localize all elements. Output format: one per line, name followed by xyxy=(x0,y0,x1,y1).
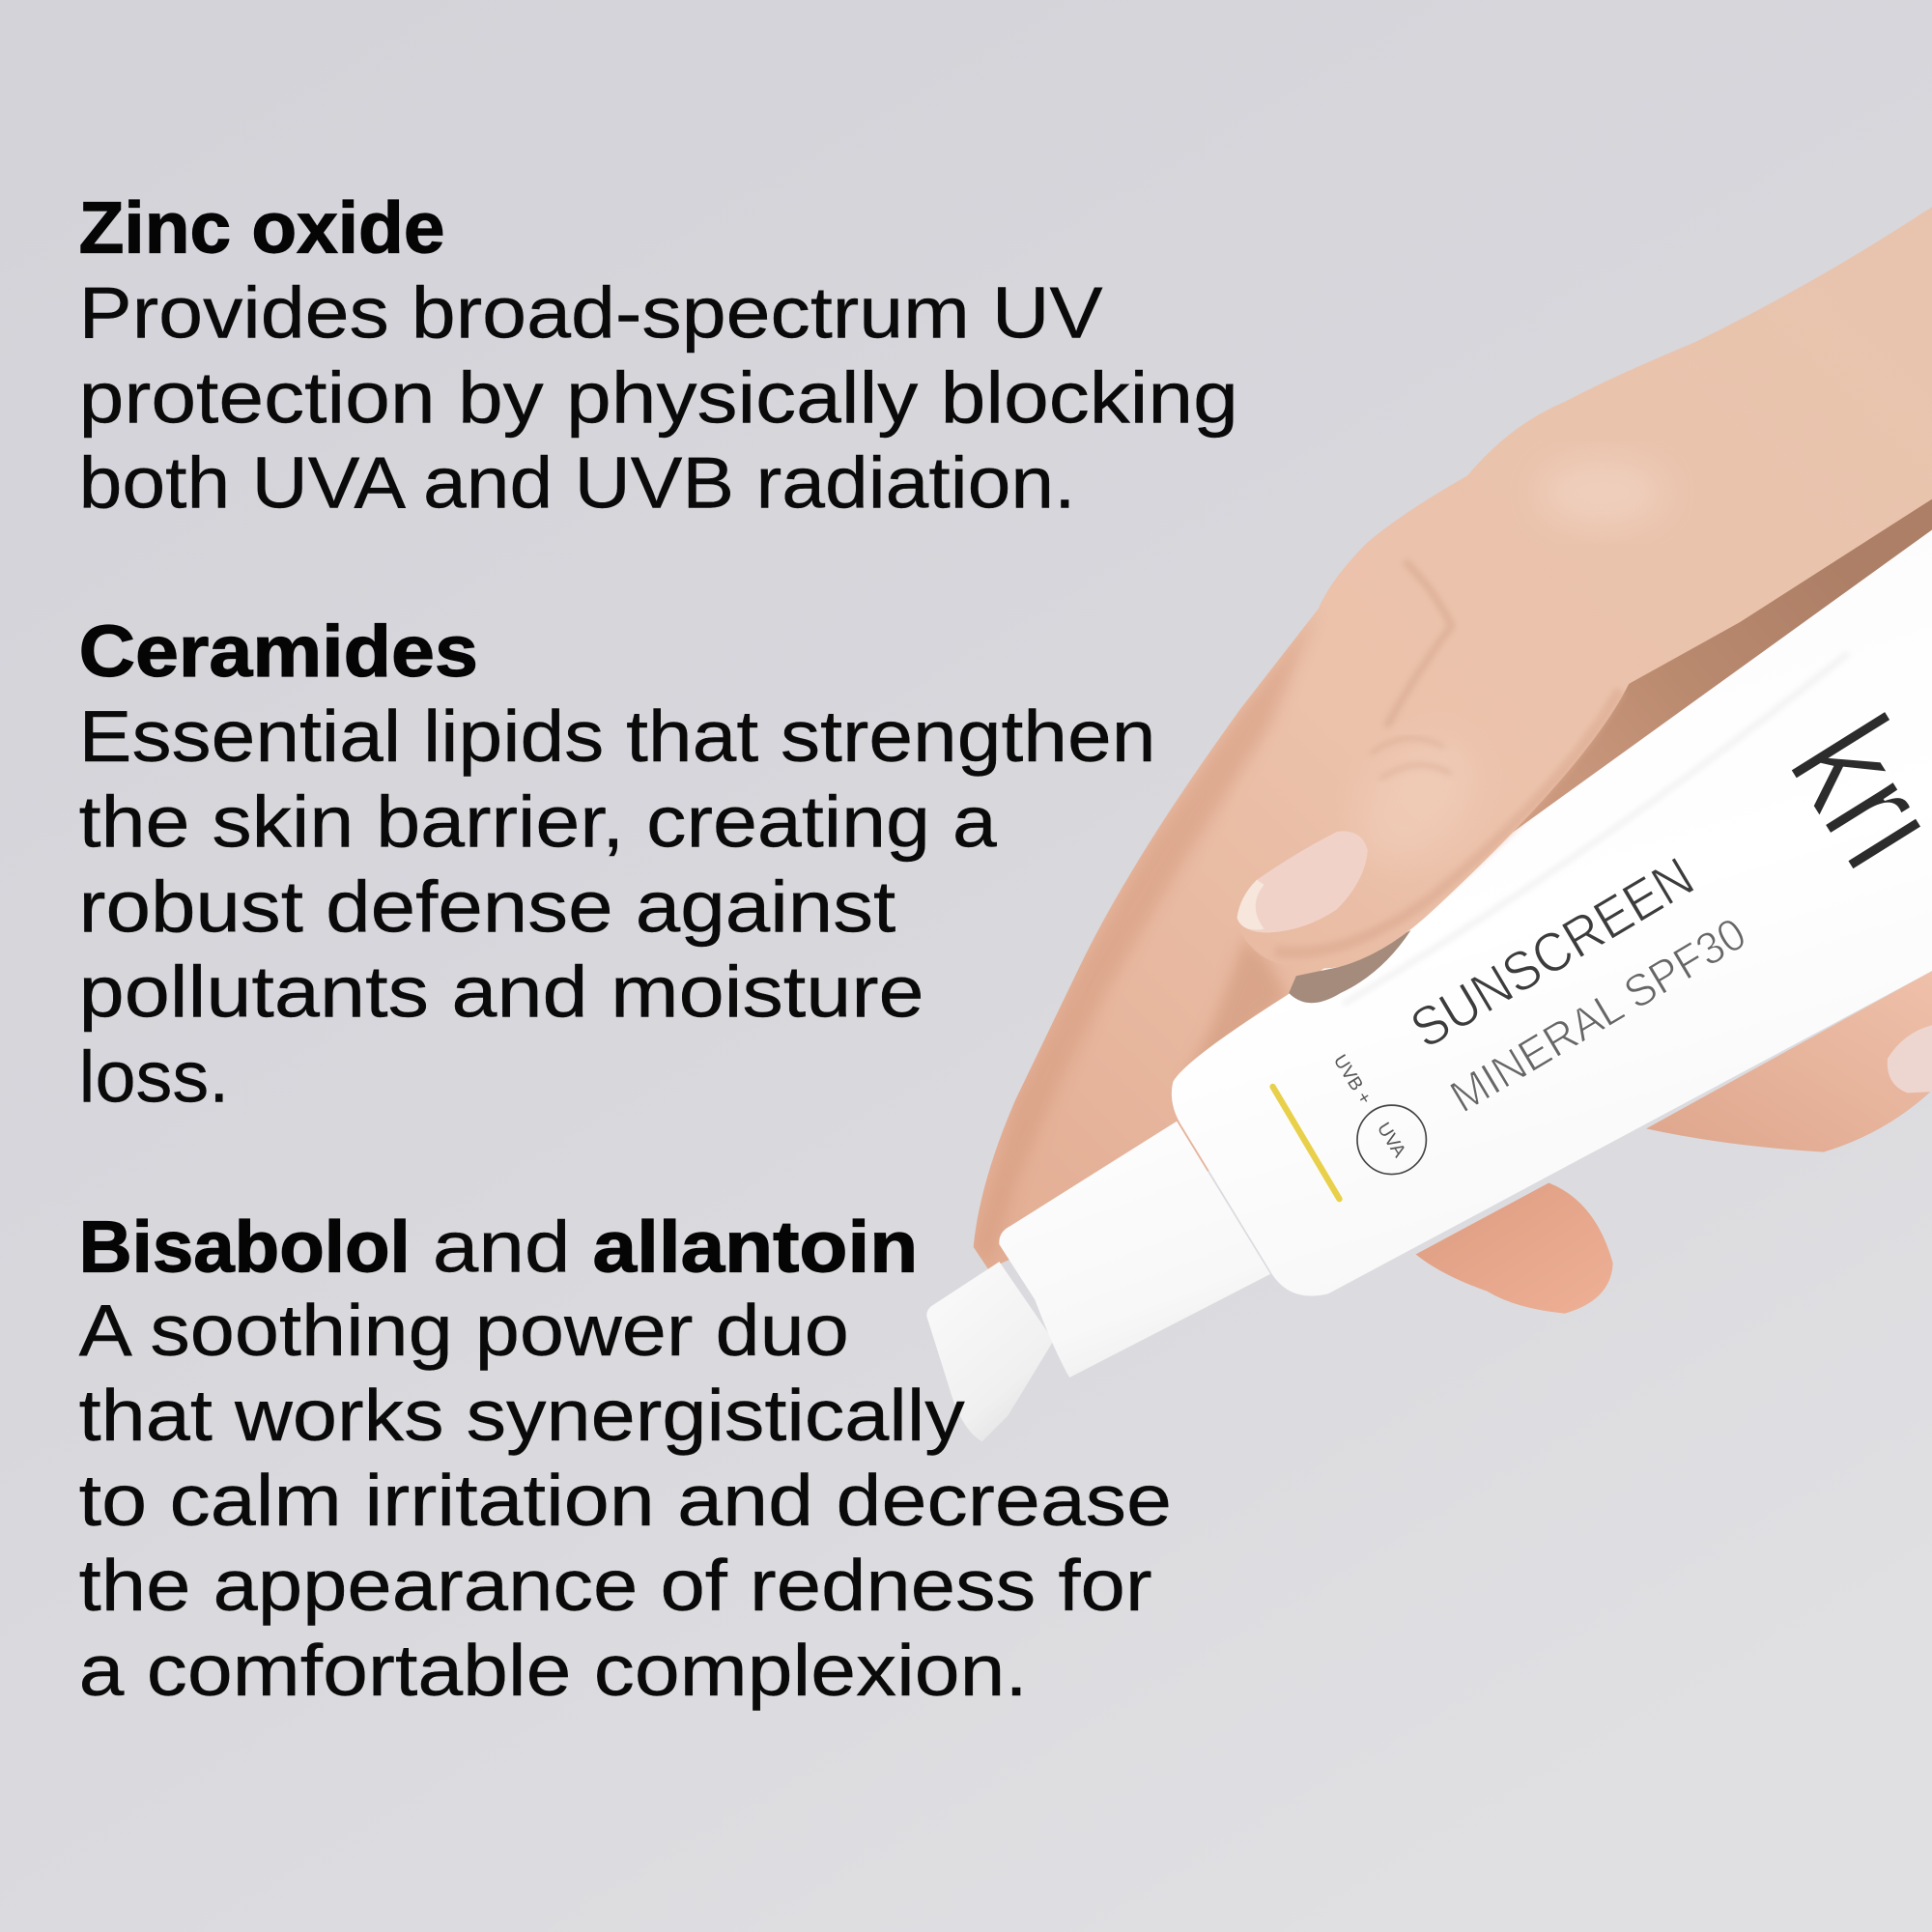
thumb knuckle wrinkles xyxy=(1370,738,1452,779)
hand behind the tube xyxy=(974,207,1932,1269)
thumb nail xyxy=(1237,831,1368,933)
heading xyxy=(79,1206,918,1287)
UVA badge: UVA xyxy=(1373,1120,1409,1161)
body copy: pollutants and moisture xyxy=(79,951,924,1032)
body copy: Provides broad-spectrum UV xyxy=(79,271,1103,353)
body copy xyxy=(79,271,1238,524)
body copy: protection by physically blocking xyxy=(79,356,1238,438)
thumb joint highlight xyxy=(1332,713,1502,890)
body copy: both UVA and UVB radiation. xyxy=(79,442,1076,524)
reflection of the fingers on the tube xyxy=(1289,930,1410,1003)
body copy: to calm irritation and decrease xyxy=(79,1460,1172,1541)
fingers in front of tube xyxy=(1236,286,1932,1314)
UVB label: UVB + xyxy=(1329,1051,1375,1108)
right finger nail xyxy=(1888,1025,1932,1093)
knuckle highlight xyxy=(1540,461,1663,525)
heading: Bisabolol xyxy=(79,1206,411,1287)
nail tip xyxy=(1237,880,1264,929)
yellow bar xyxy=(1273,1087,1339,1199)
body copy xyxy=(79,696,1155,1117)
thumb crease xyxy=(1386,560,1452,727)
heading: allantoin xyxy=(593,1206,918,1287)
body copy: that works synergistically xyxy=(79,1375,965,1456)
right finger xyxy=(1646,971,1932,1152)
tube highlight line xyxy=(1343,653,1848,1005)
nozzle xyxy=(926,1262,1054,1441)
section: zinc oxide xyxy=(79,186,1238,524)
pump neck xyxy=(999,1122,1270,1378)
section: ceramides xyxy=(79,611,1155,1117)
body copy: a comfortable complexion. xyxy=(79,1630,1028,1711)
body copy: robust defense against xyxy=(79,866,895,947)
body copy: the appearance of redness for xyxy=(79,1545,1152,1626)
product type: MINERAL SPF30 xyxy=(1442,908,1755,1123)
sunscreen tube xyxy=(926,529,1932,1441)
body copy: Essential lipids that strengthen xyxy=(79,696,1155,777)
heading: and xyxy=(433,1206,571,1287)
body copy xyxy=(79,1290,1172,1711)
back of hand and fingers xyxy=(974,207,1932,1269)
thumb under-edge shading xyxy=(1275,690,1620,952)
shadow beneath the palm xyxy=(1435,499,1932,899)
heading: Ceramides xyxy=(79,611,478,692)
heading: Zinc oxide xyxy=(79,186,444,268)
shadow beneath the thumb xyxy=(1194,941,1287,1060)
body copy: A soothing power duo xyxy=(79,1290,849,1371)
UVA badge xyxy=(1357,1105,1426,1175)
body copy: the skin barrier, creating a xyxy=(79,781,997,862)
lower finger xyxy=(1416,1182,1613,1314)
tube body xyxy=(1172,529,1932,1296)
thumb xyxy=(1236,286,1932,969)
body copy: loss. xyxy=(79,1036,229,1117)
finger edge shading xyxy=(974,609,1319,1269)
product name: SUNSCREEN xyxy=(1401,846,1704,1061)
section: bisabolol and allantoin xyxy=(79,1206,1172,1711)
